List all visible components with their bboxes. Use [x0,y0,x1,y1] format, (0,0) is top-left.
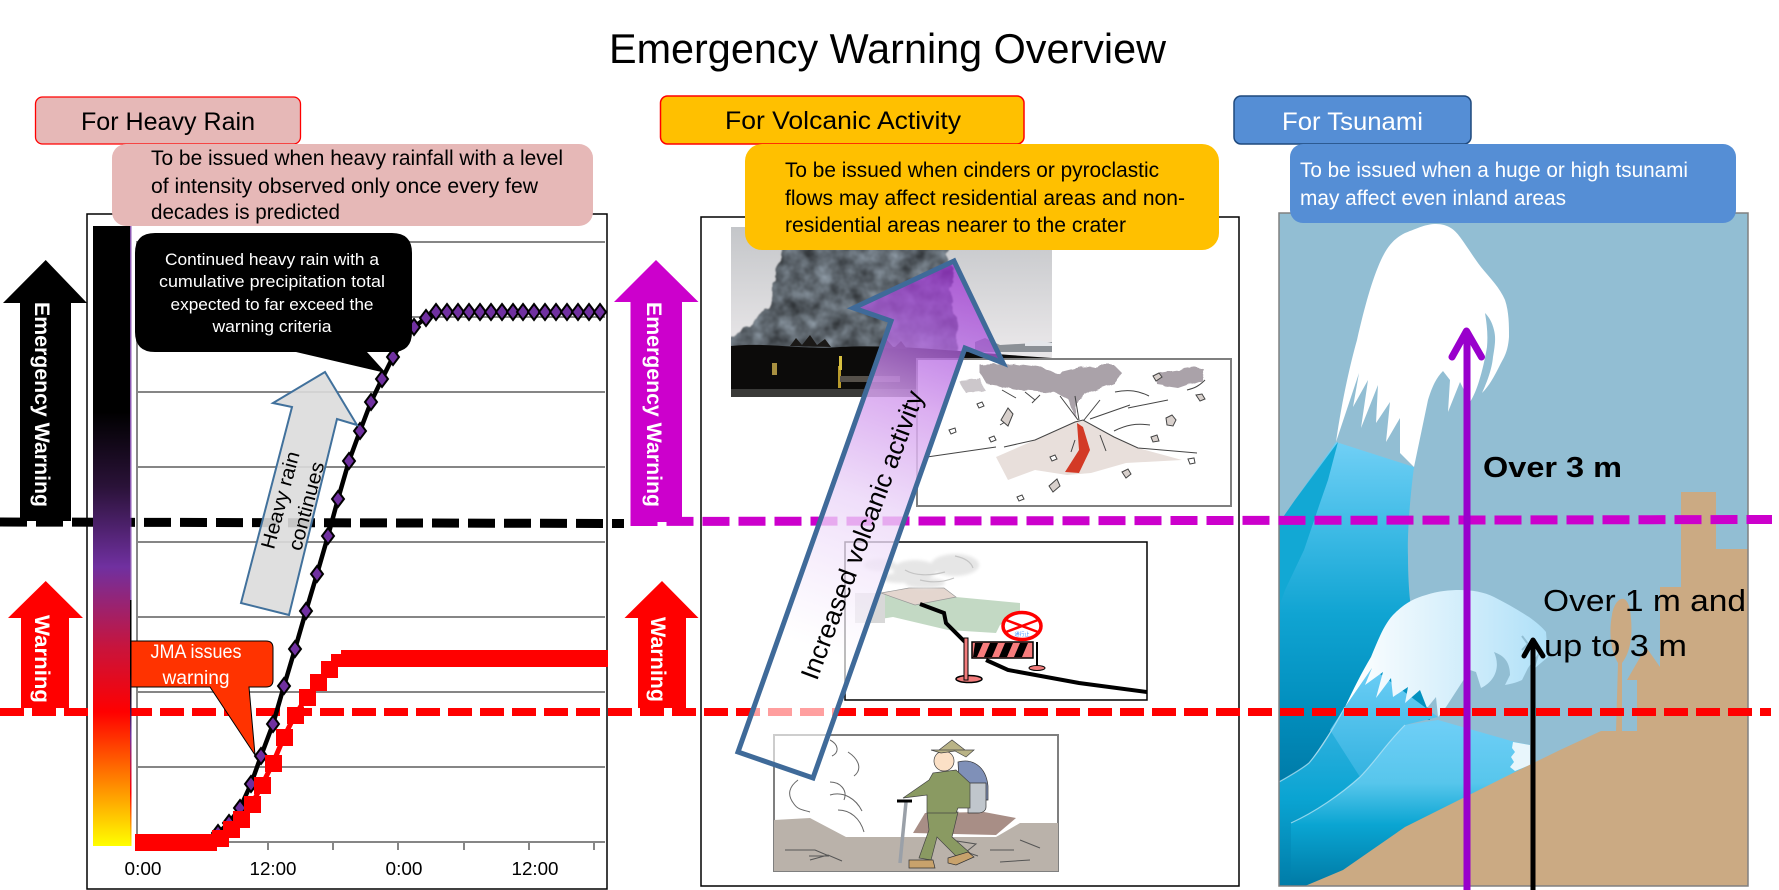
callout: continued heavy rain: Continued heavy rain with a [165,251,380,269]
arrow: heavy rain continues: continues [285,459,329,553]
callout: continued heavy rain: cumulative precipitation total [159,273,385,291]
arrow: heavy rain emergency warning [3,260,87,521]
arrow: heavy rain warning: Warning [30,615,53,703]
threshold lines [0,520,1772,712]
label: over 3 m: Over 3 m [1483,452,1622,484]
illustration: major eruption [917,359,1231,506]
middle wave layer [1280,732,1360,886]
illustration: no entry near crater [845,542,1147,700]
arrow: increased volcanic activity: Increased volcanic activity [794,386,930,684]
arrow: heavy rain continues [241,372,357,615]
text block: heavy rain criteria [112,144,593,226]
text block: volcanic criteria: residential areas nearer to the crater [785,214,1126,237]
emergency line: volcano and tsunami [630,520,1772,522]
arrow: volcanic emergency warning [614,260,698,522]
panel: heavy rain chart frame and axis [87,214,607,889]
arrow: heavy rain emergency warning: Emergency Warning [30,302,53,507]
panel: tsunami scene [1279,213,1748,886]
illustration: no entry near crater: 通行止 [1014,631,1030,638]
panel: volcanic activity frame and illustrations [701,217,1239,886]
front wave body [1291,720,1530,886]
text block: volcanic criteria: To be issued when cinders or pyroclastic [785,159,1159,182]
panel: heavy rain chart frame and axis: 12:00 [512,859,558,879]
tall wave white crest [1336,224,1509,467]
text block: heavy rain criteria: of intensity observed only once every few [151,175,539,198]
intensity colour scale [93,226,132,846]
heading: for volcanic activity [660,96,1024,144]
emergency line: heavy rain [0,522,624,524]
panel: heavy rain chart frame and axis: 0:00 [124,859,162,879]
callout: continued heavy rain: warning criteria [211,318,332,336]
text block: volcanic criteria [745,144,1219,250]
label: over 1 m and up to 3 m: up to 3 m [1544,628,1687,663]
line: precipitation series red [135,650,608,851]
arrow: volcanic warning [624,581,698,708]
illustration: hiker near steam vents [774,735,1058,871]
text block: volcanic criteria: flows may affect residential areas and non- [785,187,1185,210]
foam at wave front [1510,742,1530,771]
arrow: tsunami over 3 m [1452,331,1482,890]
title: Emergency Warning Overview [609,25,1167,72]
callout: JMA issues warning: JMA issues [150,642,242,663]
photo: eruption plume [727,227,1052,397]
heading: for volcanic activity: For Volcanic Activity [725,107,962,135]
text block: heavy rain criteria: decades is predicted [151,201,340,224]
back wave body [1279,442,1430,782]
land and buildings [1305,492,1748,886]
arrow: volcanic emergency warning: Emergency Warning [642,302,665,507]
label: over 1 m and up to 3 m [1543,583,1746,663]
arrow: volcanic warning: Warning [646,617,669,702]
heading: for heavy rain: For Heavy Rain [81,108,255,136]
arrow: heavy rain warning [8,581,83,708]
arrow: increased volcanic activity [738,261,1003,778]
warning line [0,708,1771,716]
callout: continued heavy rain [135,233,412,373]
panel: heavy rain chart frame and axis: 0:00 [386,859,422,879]
text block: tsunami criteria: may affect even inland areas [1300,187,1566,210]
text block: tsunami criteria [1290,144,1736,223]
callout: JMA issues warning [125,641,273,755]
front wave crest [1345,590,1548,717]
heading: for heavy rain [36,97,300,144]
callout: continued heavy rain: expected to far exceed the [170,296,374,314]
text block: heavy rain criteria: To be issued when heavy rainfall with a level [151,147,563,170]
arrow: tsunami over 1 m [1524,640,1543,890]
callout: JMA issues warning: warning [161,668,230,689]
heading: for tsunami: For Tsunami [1282,108,1423,136]
arrow: heavy rain continues: Heavy rain [257,449,305,551]
hiker backpack [958,761,988,800]
text block: tsunami criteria: To be issued when a huge or high tsunami [1300,159,1688,182]
panel: heavy rain foreground [93,226,608,851]
label: over 1 m and up to 3 m: Over 1 m and [1543,583,1746,618]
heading: for tsunami [1234,96,1471,144]
panel: heavy rain chart frame and axis: 12:00 [250,859,296,879]
line: cumulative precipitation series purple [190,304,606,842]
